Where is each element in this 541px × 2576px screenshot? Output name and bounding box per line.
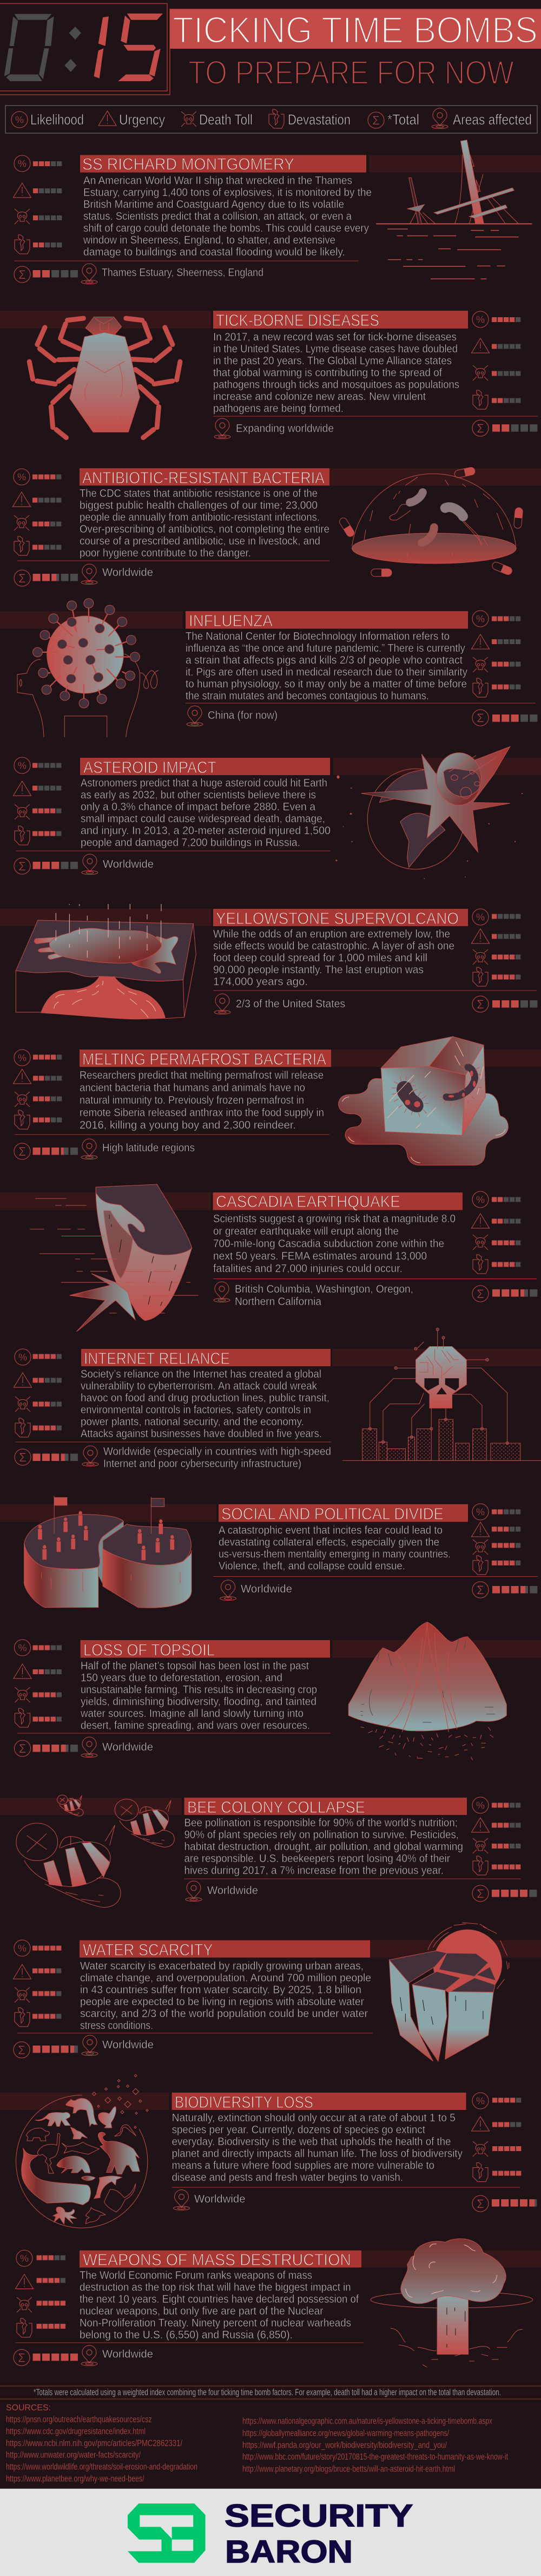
description: havoc on food and drug production lines, public transit, [81, 1392, 329, 1404]
description: a strain that affects pigs and kills 2/3 of people who contract [186, 654, 463, 666]
description: shift of cargo could detonate the bombs. This could cause every [83, 222, 369, 234]
description: nuclear weapons, but only five are part of the Nuclear [80, 2305, 324, 2317]
description: the strain mutates and becomes contagious to humans. [186, 690, 429, 702]
heading [0, 909, 468, 928]
ratings [472, 2093, 521, 2181]
description: it. Pigs are often used in medical research due to their similarity [186, 666, 467, 678]
description: Water scarcity is exacerbated by rapidly growing urban areas, [80, 1961, 364, 1972]
location: Worldwide [207, 1885, 258, 1897]
ratings [472, 1191, 520, 1274]
location [82, 2035, 154, 2056]
panel: SS Richard Montgomery [13, 140, 541, 284]
description: pathogens are being formed. [213, 403, 344, 415]
description: British Maritime and Coastguard Agency due to its volatile [83, 199, 344, 211]
legend: Devastation [288, 112, 351, 128]
illustration: supervolcano block [16, 904, 196, 1019]
illustration: shipwreck [376, 140, 532, 279]
sources: https://globallymealliance.org/news/global-warming-means-pathogens/ [242, 2428, 449, 2439]
countdown clock 0:15 [0, 3, 170, 95]
location: High latitude regions [102, 1142, 195, 1154]
description: people and damaged 7,200 buildings in Russia. [81, 837, 300, 849]
location: Expanding worldwide [236, 423, 334, 435]
description: species per year. Currently, dozens of species go extinct [172, 2124, 425, 2136]
illustration: asteroid hitting Earth [335, 746, 523, 879]
total rating [472, 1582, 537, 1598]
description: The CDC states that antibiotic resistance is one of the [80, 488, 318, 500]
ratings [13, 1940, 61, 2027]
description: unsustainable farming. This results in decreasing crop [81, 1684, 317, 1696]
panel: Antibiotic-resistant bacteria [13, 467, 541, 586]
ratings [472, 1797, 520, 1875]
heading: ANTIBIOTIC-RESISTANT BACTERIA [82, 468, 325, 487]
description: desert, famine spreading, and wars over resources. [81, 1720, 310, 1732]
legend: Urgency [119, 112, 165, 128]
heading [81, 1640, 541, 1660]
heading: BIODIVERSITY LOSS [175, 2093, 313, 2112]
panel: Cascadia earthquake [0, 1184, 537, 1332]
description [80, 488, 329, 559]
description [213, 331, 459, 415]
ratings [13, 469, 61, 555]
panel: Influenza [0, 599, 537, 737]
sources: https://wwf.panda.org/our_work/biodiversity/biodiversity_and_you/ [242, 2440, 447, 2450]
location [81, 1737, 153, 1757]
description [186, 631, 467, 702]
heading [80, 468, 541, 487]
heading [0, 311, 468, 330]
ratings [14, 1349, 62, 1437]
header [0, 3, 541, 133]
location [186, 1881, 258, 1901]
description: in the United States. Lyme disease cases have doubled [213, 343, 458, 355]
wordmark: BARON [225, 2534, 353, 2570]
description: poor hygiene contribute to the danger. [80, 547, 251, 559]
description: stress conditions. [80, 2020, 153, 2032]
panel: Melting permafrost bacteria [13, 1037, 541, 1165]
panel: Asteroid impact [13, 746, 541, 879]
illustration: virus and pig [17, 599, 159, 737]
legend: *Total [387, 112, 419, 128]
total rating [15, 1449, 78, 1465]
location: Internet and poor cybersecurity infrastructure) [103, 1458, 301, 1470]
wordmark: SECURITY [225, 2499, 413, 2534]
illustration: fault block [30, 1184, 199, 1332]
description: side effects would be catastrophic. A layer of ash one [213, 940, 454, 952]
location [173, 2190, 246, 2210]
description: 174,000 years ago. [213, 976, 308, 988]
description: Naturally, extinction should only occur at a rate of about 1 to 5 [172, 2112, 456, 2124]
location [214, 994, 345, 1014]
location [82, 1446, 331, 1470]
panel: Weapons of mass destruction [14, 2239, 541, 2368]
location: Thames Estuary, Sheerness, England [102, 267, 263, 279]
description: the next 10 years. Eight countries have declared possession of [80, 2293, 359, 2305]
heading: ASTEROID IMPACT [83, 758, 216, 777]
panel: Biodiversity loss [0, 2074, 537, 2228]
heading: CASCADIA EARTHQUAKE [216, 1192, 400, 1211]
description [80, 1070, 324, 1131]
description: that global warming is contributing to the spread of [213, 367, 442, 379]
sources: http://www.planetary.org/blogs/bruce-betts/will-an-asteroid-hit-earth.html [242, 2464, 455, 2474]
description [81, 777, 331, 849]
heading: WATER SCARCITY [83, 1940, 213, 1959]
description: environmental controls in factories, safety controls in [81, 1404, 311, 1416]
description: hives during 2017, a 7% increase from the previous year. [184, 1865, 444, 1877]
location: Worldwide [102, 567, 153, 579]
location [220, 1580, 292, 1600]
sources: https://pnsn.org/outreach/earthquakesources/csz [6, 2414, 152, 2424]
description: natural immunity to. Previously frozen permafrost in [80, 1094, 304, 1106]
location: China (for now) [208, 710, 278, 722]
description: Over-prescribing of antibiotics, not completing the entire [80, 523, 329, 535]
description [80, 2270, 359, 2341]
description [81, 1368, 329, 1440]
location [81, 564, 153, 585]
description: Astronomers predict that a huge asteroid could hit Earth [81, 777, 327, 789]
heading: TICK-BORNE DISEASES [216, 311, 379, 330]
heading: MELTING PERMAFROST BACTERIA [82, 1050, 326, 1069]
description: Half of the planet’s topsoil has been lost in the past [81, 1660, 309, 1672]
description: people are expected to be living in regions with absolute water [80, 1996, 364, 2008]
description: water sources. Imagine all land slowly turning into [80, 1708, 304, 1720]
heading [80, 2250, 541, 2269]
description: Researchers predict that melting permafrost will release [80, 1070, 324, 1081]
illustration: eroding mountain [348, 1622, 506, 1760]
heading: BEE COLONY COLLAPSE [187, 1798, 365, 1817]
location: Worldwide [102, 2348, 153, 2360]
description: Attacks against businesses have doubled in five years. [81, 1428, 322, 1440]
heading: SS RICHARD MONTGOMERY [82, 155, 294, 173]
legend [5, 106, 537, 133]
description [80, 1660, 317, 1732]
description: fatalities and 27,000 injuries could occur. [213, 1263, 403, 1275]
description: disease and pests and fresh water begins to vanish. [172, 2172, 403, 2184]
description: planet and directly impacts all human life. The loss of biodiversity [172, 2148, 463, 2160]
total rating [14, 570, 78, 586]
description: everyday. Biodiversity is the web that upholds the health of the [172, 2136, 451, 2148]
total rating [472, 710, 537, 726]
description: influenza as “the once and future pandemic.” There is currently [186, 643, 465, 654]
description: Scientists suggest a growing risk that a magnitude 8.0 [213, 1213, 456, 1225]
location [81, 2345, 153, 2365]
illustration: dead bees [16, 1795, 174, 1908]
heading [0, 1504, 468, 1523]
sources: http://www.unwater.org/water-facts/scarcity/ [6, 2450, 141, 2460]
legend: Death Toll [199, 112, 253, 128]
heading [80, 155, 541, 173]
panel: Loss of topsoil [14, 1622, 541, 1760]
illustration: tick [29, 317, 180, 437]
ratings [472, 909, 520, 986]
description: vulnerability to cyberterrorism. An attack could wreak [81, 1380, 318, 1392]
illustration: digital skull over city [342, 1328, 541, 1460]
description: pathogens through ticks and mosquitoes as populations [213, 379, 459, 391]
description: means a future where food supplies are more vulnerable to [172, 2160, 434, 2172]
description [184, 1817, 463, 1877]
description: 2016, killing a young boy and 2,300 reindeer. [80, 1119, 296, 1131]
location [82, 854, 154, 875]
total rating [472, 1885, 537, 1902]
description: Bee pollination is responsible for 90% of the world’s nutrition; [184, 1817, 458, 1829]
location [214, 1282, 413, 1308]
location: Worldwide (especially in countries with high-speed [103, 1446, 331, 1458]
heading: WEAPONS OF MASS DESTRUCTION [83, 2250, 351, 2269]
description: are responsible. U.S. beekeepers report losing 40% of their [184, 1853, 450, 1865]
description: foot deep could spread for 1,000 miles and kill [213, 952, 427, 964]
location: British Columbia, Washington, Oregon, [235, 1283, 413, 1295]
heading [80, 1940, 541, 1959]
total rating [14, 2349, 78, 2365]
heading [0, 1192, 463, 1211]
description: scarcity, and 2/3 of the world population could be under water [80, 2008, 368, 2020]
ratings [15, 2250, 65, 2337]
location: Worldwide [103, 858, 154, 870]
illustration: cracked dry earth and sun [389, 1923, 509, 2061]
location: Worldwide [194, 2193, 246, 2205]
description: Violence, theft, and collapse could ensue. [219, 1560, 405, 1572]
total rating [472, 420, 537, 436]
description: status. Scientists predict that a collision, an attack, or even a [83, 211, 352, 222]
heading [0, 611, 468, 630]
heading [0, 1798, 467, 1817]
heading: INTERNET RELIANCE [84, 1349, 230, 1368]
sources: https://www.worldwildlife.org/threats/soil-erosion-and-degradation [6, 2462, 197, 2472]
description: A catastrophic event that incites fear could lead to [219, 1524, 443, 1536]
location: Northern California [235, 1296, 322, 1308]
description: climate change, and overpopulation. Around 700 million people [80, 1972, 371, 1984]
location: Worldwide [102, 2039, 154, 2051]
description [213, 1213, 456, 1275]
location: Worldwide [241, 1583, 292, 1595]
total rating [472, 1286, 537, 1302]
sources: https://www.cdc.gov/drugresistance/index.html [6, 2426, 146, 2436]
total rating [14, 858, 78, 874]
heading: YELLOWSTONE SUPERVOLCANO [216, 909, 459, 928]
heading: SOCIAL AND POLITICAL DIVIDE [221, 1504, 444, 1523]
panel: Social and political divide [0, 1496, 538, 1608]
description: 90,000 people instantly. The last eruption was [213, 964, 424, 976]
wordmark [225, 2499, 413, 2570]
description: window in Sheerness, England, to shatter, and extensive [83, 234, 335, 246]
description: While the odds of an eruption are extremely low, the [213, 928, 450, 940]
illustration: animals in a globe [16, 2074, 148, 2228]
description: The National Center for Biotechnology Information refers to [186, 631, 450, 643]
ratings [472, 311, 520, 409]
ratings [14, 1640, 62, 1727]
ratings [13, 1050, 62, 1129]
location [214, 418, 334, 438]
description: belong to the U.S. (6,550) and Russia (6,850). [80, 2329, 293, 2341]
legend: Likelihood [30, 112, 84, 128]
total rating [14, 1740, 78, 1756]
panel: Tick-borne diseases [0, 311, 538, 438]
illustration: divided land with people and flags [24, 1496, 192, 1608]
description: only a 0.3% chance of impact before 2880. Even a [81, 801, 316, 813]
description: in 43 countries suffer from water scarcity. By 2025, 1.8 billion [80, 1984, 361, 1996]
heading: INFLUENZA [189, 611, 273, 630]
description: us-versus-them mentality emerging in many countries. [219, 1548, 451, 1560]
description: and injury. In 2013, a 20-meter asteroid injured 1,500 [81, 825, 331, 837]
logo mark [128, 2503, 205, 2563]
description [172, 2112, 463, 2184]
location: 2/3 of the United States [236, 998, 345, 1010]
sources: https://www.planetbee.org/why-we-need-bees/ [6, 2474, 144, 2484]
description [83, 175, 372, 258]
sources [6, 2403, 508, 2484]
description: The World Economic Forum ranks weapons of mass [80, 2270, 312, 2282]
description [219, 1524, 451, 1572]
total rating [472, 2195, 537, 2212]
description: remote Siberia released anthrax into the food supply in [80, 1107, 324, 1119]
description: next 50 years. FEMA estimates around 13,000 [213, 1250, 427, 1262]
heading [80, 1050, 541, 1069]
location [81, 264, 263, 284]
footer: Security Baron logo [0, 2489, 541, 2576]
sources: SOURCES: [6, 2403, 51, 2413]
heading [80, 758, 541, 777]
description: ancient bacteria that humans and animals have no [80, 1082, 305, 1094]
total rating [14, 2042, 78, 2058]
description: 150 years due to deforestation, erosion, and [81, 1672, 282, 1684]
heading: LOSS OF TOPSOIL [83, 1640, 215, 1660]
description: An American World War II ship that wrecked in the Thames [83, 175, 352, 187]
description: Estuary, carrying 1,400 tons of explosives, it is monitored by the [83, 187, 372, 199]
location [187, 706, 278, 726]
description: as early as 2032, but other scientists believe there is [81, 789, 316, 801]
description: Society’s reliance on the Internet has created a global [81, 1368, 321, 1380]
illustration: melting ice cube with bacteria [339, 1037, 508, 1165]
description: people die annually from antibiotic-resistant infections. [80, 512, 320, 523]
ratings [472, 1504, 520, 1575]
description: in the past 20 years. The Global Lyme Alliance states [213, 355, 452, 367]
total rating [14, 266, 78, 283]
description: yields, diminishing biodiversity, flooding, and tainted [81, 1696, 316, 1708]
ratings [13, 155, 62, 254]
illustration: bacteria under dome [338, 467, 523, 576]
description: devastating collateral effects, especially given the [219, 1536, 439, 1548]
location: Worldwide [102, 1741, 153, 1753]
location [81, 1139, 195, 1159]
sources: https://www.ncbi.nlm.nih.gov/pmc/articles/PMC2862331/ [6, 2438, 182, 2448]
illustration: mushroom cloud [371, 2239, 533, 2368]
total rating [14, 1143, 78, 1159]
description: destruction as the top risk that will have the biggest impact in [80, 2282, 351, 2293]
panel: Yellowstone supervolcano [0, 904, 537, 1019]
heading [81, 1349, 541, 1368]
panel: Internet reliance [14, 1328, 541, 1470]
description: increase and colonize new areas. New virulent [213, 391, 426, 403]
description: biggest public health challenges of our time; 23,000 [80, 500, 318, 512]
ratings [13, 757, 61, 845]
description [213, 928, 454, 988]
ratings [472, 611, 520, 697]
description: power plants, national security, and the economy. [81, 1416, 304, 1428]
total rating [472, 996, 537, 1012]
description: to human physiology, so it may only be a matter of time before [186, 678, 467, 690]
description: damage to buildings and coastal flooding would be likely. [83, 246, 345, 258]
description: 700-mile-long Cascadia subduction zone within the [213, 1238, 444, 1250]
description: course of a prescribed antibiotic, use in livestock, and [80, 535, 320, 547]
description: or greater earthquake will erupt along the [213, 1225, 399, 1237]
description: small impact could cause widespread death, damage, [81, 813, 325, 825]
description: In 2017, a new record was set for tick-borne diseases [213, 331, 457, 343]
heading [0, 2093, 466, 2112]
panel: Bee colony collapse [0, 1795, 537, 1908]
description [80, 1961, 371, 2032]
description: Non-Proliferation Treaty. Ninety percent of nuclear warheads [80, 2317, 351, 2329]
description: habitat destruction, drought, air pollution, and global warming [184, 1841, 463, 1853]
panel: Water scarcity [13, 1923, 541, 2061]
description: 90% of plant species rely on pollination to survive. Pesticides, [184, 1829, 459, 1841]
